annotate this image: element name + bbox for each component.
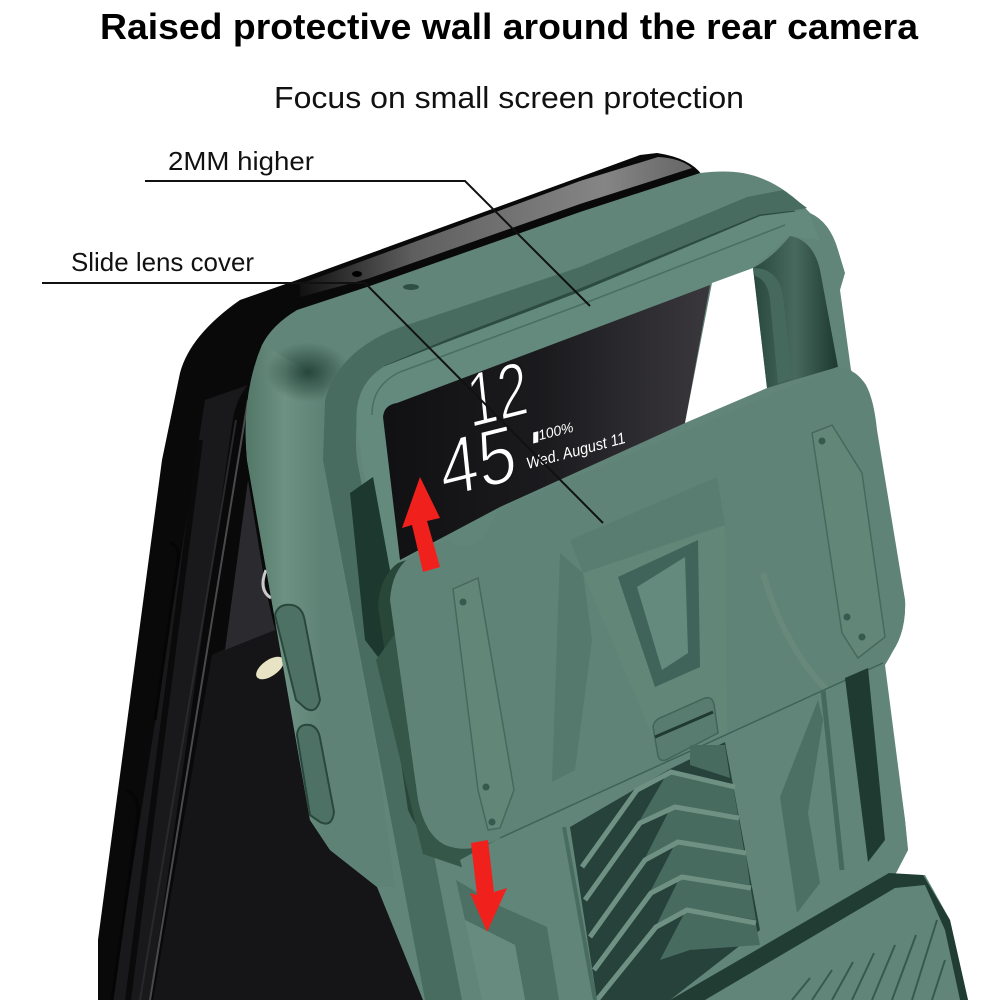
shield right crease: [763, 573, 830, 693]
stand stripes: [792, 920, 945, 1000]
lower left hex panel: [465, 920, 525, 1000]
slider grip: [653, 698, 718, 760]
label: 2MM higher: 2MM higher: [168, 146, 314, 176]
side slot: [350, 477, 398, 657]
arrow up: [402, 477, 440, 572]
subtitle: Focus on small screen protection: [274, 80, 744, 115]
shield raised face: [583, 525, 727, 770]
battery: ▮100%: [529, 419, 575, 445]
slider shadow: [378, 548, 500, 860]
wall groove band: [323, 190, 807, 1000]
ribbed stand background: [570, 742, 760, 1000]
lower panel: [460, 665, 908, 1000]
title: Raised protective wall around the rear camera: [100, 6, 919, 47]
left rail edge: [564, 827, 595, 1000]
label: slide lens cover: [42, 247, 603, 523]
phone body: [98, 153, 705, 1000]
phone left side panel: [112, 385, 248, 1000]
right rail strip: [845, 668, 885, 862]
arrow down: [470, 840, 507, 932]
ribs: [582, 772, 756, 1000]
post inner ridge: [753, 268, 792, 384]
phone illustration: [98, 153, 968, 1000]
hinge ring: [263, 570, 271, 598]
phone top glossy strip: [300, 157, 692, 297]
trapezoid bevel: [618, 540, 700, 687]
shield left band: [552, 553, 592, 782]
time minute: 45: [435, 407, 521, 516]
stand dark lip: [670, 873, 968, 1000]
time hour: 12: [463, 345, 532, 445]
phone rear panel: [153, 620, 425, 1000]
right frame post: [753, 236, 838, 388]
rail inner line: [823, 690, 842, 870]
leader line: [145, 181, 590, 306]
clock digits and status: [444, 364, 626, 491]
rib faces: [640, 745, 760, 960]
slider underside: [376, 600, 520, 870]
date: Wed. August 11: [525, 430, 628, 473]
stand top face: [705, 885, 960, 1000]
screen: [383, 285, 710, 560]
shoulder shadow: [266, 342, 350, 402]
top speaker hole: [352, 271, 362, 277]
camera recess: [225, 480, 275, 650]
slider left panel: [453, 578, 514, 830]
trapezoid face: [637, 557, 688, 670]
frame rim: [356, 210, 820, 600]
slider right panel: [812, 425, 885, 658]
label: 2MM higher: [145, 146, 590, 306]
case left wall light: [246, 345, 395, 887]
slider lower edge: [500, 663, 883, 838]
slider cover: [390, 367, 905, 849]
right rail trim: [780, 700, 823, 913]
side buttons: [275, 605, 334, 824]
phone side keys: [112, 543, 178, 1000]
label: slide lens cover: Slide lens cover: [71, 247, 254, 277]
shield top band: [570, 477, 725, 573]
screw holes: [460, 438, 866, 826]
lower left chevron band: [456, 880, 559, 1000]
window white gap: [685, 268, 767, 423]
case body: [246, 172, 968, 1000]
groove dark line: [385, 212, 795, 367]
rim fine line: [372, 225, 785, 415]
phone edge lines: [128, 400, 248, 1000]
flash lens: [252, 652, 288, 684]
leader line: [42, 283, 603, 523]
case mic hole: [403, 284, 419, 290]
